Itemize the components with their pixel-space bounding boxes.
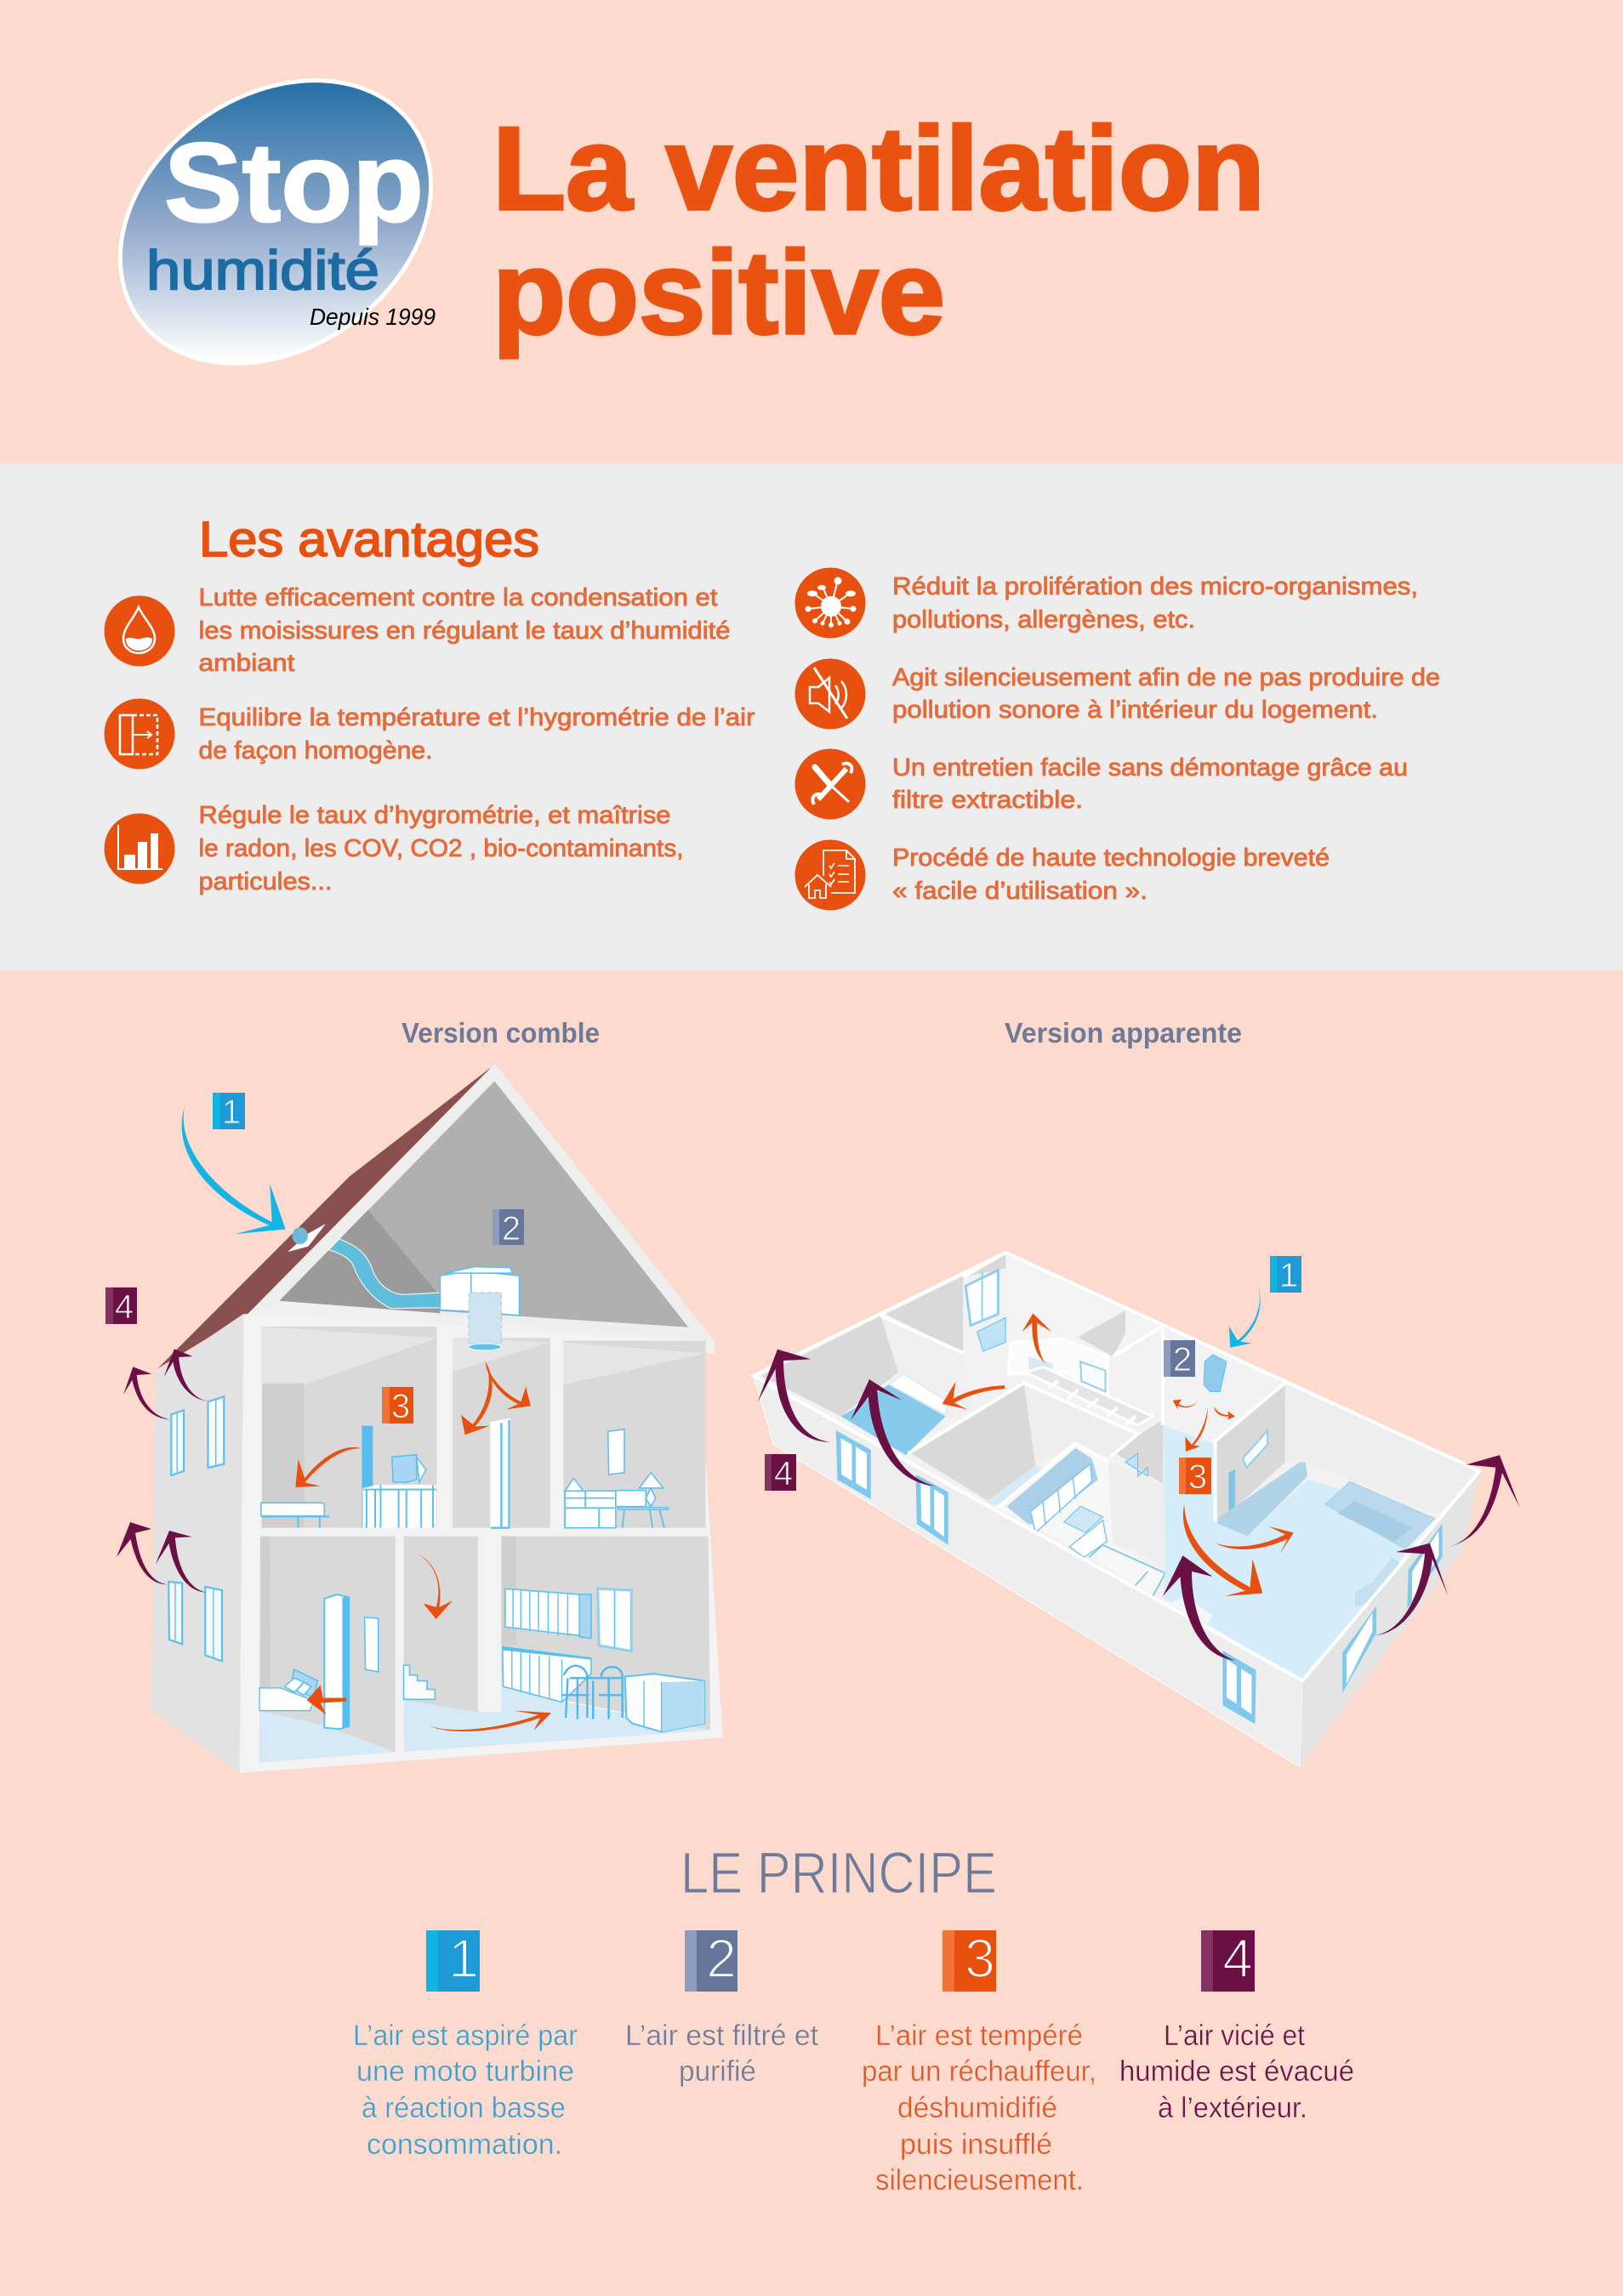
- title: [493, 103, 1265, 359]
- arrow: fresh air house: [182, 1106, 286, 1234]
- icon: muted speaker: [794, 658, 866, 730]
- ventilation unit: [1204, 1355, 1227, 1392]
- badge 4: 4: [1222, 1928, 1253, 1989]
- text step 3: déshumidifié: [897, 2092, 1057, 2124]
- roof vent: [288, 1224, 326, 1252]
- text: entretien: [892, 754, 1408, 814]
- text step 2: [625, 2020, 819, 2088]
- text: condensation: ambiant: [199, 650, 294, 677]
- badge 1 apartment: 1: [1279, 1257, 1298, 1294]
- badge 4 house: 4: [115, 1288, 134, 1326]
- arrow: fresh air apartment: [1229, 1281, 1261, 1348]
- text: micro-organismes: Réduit la prolifération des micro-organismes,: [892, 573, 1418, 600]
- badge 2 house: [493, 1209, 524, 1247]
- badge 1 house: 1: [222, 1094, 241, 1131]
- text: brevet: [892, 844, 1330, 905]
- text: entretien: Un entretien facile sans démontage grâce au: [892, 754, 1408, 781]
- icon: water drop: [104, 595, 175, 667]
- panel: les avantages: [0, 463, 1623, 970]
- badge 1 house: [213, 1093, 245, 1131]
- kitchen: [1000, 1445, 1165, 1596]
- apartment shell: [754, 1253, 1480, 1767]
- arrows: stale air house lower: [117, 1522, 207, 1593]
- text: hygrométrie: Régule le taux d’hygrométrie, et maîtrise: [199, 802, 670, 829]
- text step 1: [353, 2020, 578, 2161]
- badge 2 house: 2: [502, 1210, 521, 1247]
- text step 4: à l’extérieur.: [1158, 2092, 1307, 2124]
- heading: les avantages: Les avantages: [199, 512, 539, 567]
- text: condensation: Lutte efficacement contre la condensation et: [199, 584, 718, 611]
- text step 1: consommation.: [367, 2128, 562, 2161]
- sofa and lamps: [565, 1491, 616, 1528]
- logo: Stop humidité: humidité: [146, 239, 379, 301]
- icon: virus: [794, 568, 866, 638]
- icon: bar chart: [104, 813, 175, 884]
- badge 4 apartment: 4: [774, 1455, 793, 1492]
- text: silencieux: pollution sonore à l’intérieur du logement.: [892, 696, 1378, 724]
- text step 1: une moto turbine: [356, 2055, 574, 2088]
- downstairs rooms: [259, 1537, 396, 1763]
- heading: version apparente: Version apparente: [1005, 1017, 1242, 1049]
- text step 4: humide est évacué: [1119, 2055, 1354, 2088]
- text: condensation: [199, 584, 730, 677]
- arrows: conditioned air house: [295, 1361, 551, 1731]
- badges: house: [105, 1093, 524, 1425]
- text: brevet: « facile d’utilisation ».: [892, 878, 1147, 905]
- heading: le principe: LE PRINCIPE: [681, 1840, 997, 1906]
- text step 1: à réaction basse: [362, 2092, 566, 2124]
- title: positive: [493, 227, 945, 359]
- badge 2 apartment: [1164, 1340, 1195, 1378]
- text: température: Equilibre la température et l’hygrométrie de l’air: [199, 704, 755, 731]
- windows on side wall: [168, 1396, 224, 1661]
- downstairs furniture: [324, 1594, 349, 1729]
- badge 3 apartment: [1179, 1458, 1211, 1496]
- text step 4: [1119, 2020, 1354, 2124]
- tops of walls: [754, 1253, 1480, 1680]
- text: silencieux: [892, 664, 1440, 724]
- badge 4: [1201, 1928, 1255, 1992]
- arrows: stale air house upper: [123, 1349, 208, 1419]
- badge 3 house: [382, 1387, 413, 1425]
- badge 3 house: 3: [391, 1388, 410, 1425]
- badge 1: 1: [448, 1928, 479, 1989]
- badges: apartment: [765, 1256, 1301, 1496]
- illustration: house cutaway: [117, 1064, 723, 1773]
- central room: [911, 1384, 1035, 1501]
- text step 4: L’air vicié et: [1164, 2020, 1306, 2052]
- sofa: [1325, 1481, 1435, 1549]
- text: silencieux: Agit silencieusement afin de ne pas produire de: [892, 664, 1440, 691]
- text step 3: silencieusement.: [875, 2164, 1084, 2197]
- arrows: conditioned air apartment: [942, 1314, 1294, 1596]
- badge 2: [685, 1928, 737, 1992]
- badge 4 house: [105, 1287, 137, 1326]
- badge 1 apartment: [1270, 1256, 1301, 1294]
- icon: tools: [794, 748, 866, 820]
- badge 3: 3: [965, 1928, 995, 1989]
- illustration: apartment cutaway: [754, 1253, 1519, 1767]
- badge 1: [426, 1928, 480, 1992]
- windows: [836, 1430, 1443, 1724]
- air duct: [329, 1239, 441, 1309]
- text: condensation: les moisissures en régulant le taux d’humidité: [199, 617, 730, 645]
- text: température: de façon homogène.: [199, 737, 432, 764]
- logo: Stop humidité: Depuis 1999: [310, 304, 436, 330]
- upstairs furniture: [261, 1503, 324, 1516]
- bed: [889, 1374, 948, 1414]
- text step 3: puis insufflé: [900, 2128, 1052, 2161]
- text step 1: L’air est aspiré par: [353, 2020, 578, 2052]
- ventilation unit: [440, 1270, 520, 1316]
- text: micro-organismes: pollutions, allergènes, etc.: [892, 606, 1195, 634]
- window and radiator: [965, 1270, 998, 1326]
- floors: [259, 1711, 394, 1763]
- text: brevet: Procédé de haute technologie breveté: [892, 844, 1330, 872]
- text step 2: purifié: [679, 2055, 756, 2088]
- step 1: [353, 1928, 578, 2161]
- house roof and attic: [157, 1064, 715, 1368]
- corridor: [1008, 1338, 1108, 1395]
- ceiling vent duct: [469, 1293, 501, 1350]
- badge 3: [942, 1928, 996, 1992]
- text: micro-organismes: [892, 573, 1418, 634]
- badge 2 apartment: 2: [1173, 1341, 1192, 1378]
- heading: version comble: Version comble: [401, 1017, 600, 1049]
- house walls and rooms: [151, 1293, 723, 1773]
- text step 3: L’air est tempéré: [875, 2020, 1083, 2052]
- upstairs rooms: [262, 1327, 437, 1528]
- icon: partition arrow: [104, 699, 175, 769]
- back wall living room: [1285, 1383, 1480, 1515]
- text step 3: par un réchauffeur,: [862, 2055, 1096, 2088]
- step 4: [1119, 1928, 1354, 2124]
- text: hygrométrie: particules...: [199, 868, 332, 895]
- badge 3 apartment: 3: [1188, 1458, 1207, 1496]
- text step 2: L’air est filtré et: [625, 2020, 819, 2052]
- text: hygrométrie: [199, 802, 684, 895]
- title: La ventilation: [493, 103, 1265, 235]
- text step 3: [862, 2020, 1096, 2197]
- hall wall: [1108, 1462, 1165, 1571]
- text: hygrométrie: le radon, les COV, CO2 , bio-contaminants,: [199, 835, 684, 862]
- badge 2: 2: [706, 1928, 737, 1989]
- far rooms: [761, 1316, 898, 1417]
- step 3: [862, 1928, 1096, 2197]
- arrows: stale air apartment: [758, 1350, 1519, 1661]
- text: température: [199, 704, 755, 764]
- badge 4 apartment: [765, 1454, 796, 1492]
- logo: Stop humidité: Stop: [164, 120, 424, 245]
- logo: Stop humidité: [65, 22, 486, 422]
- icon: document and house: [794, 840, 866, 910]
- living room floor: [1163, 1425, 1435, 1680]
- partition: [1216, 1383, 1285, 1522]
- text: entretien: filtre extractible.: [892, 787, 1083, 814]
- step 2: [625, 1928, 819, 2088]
